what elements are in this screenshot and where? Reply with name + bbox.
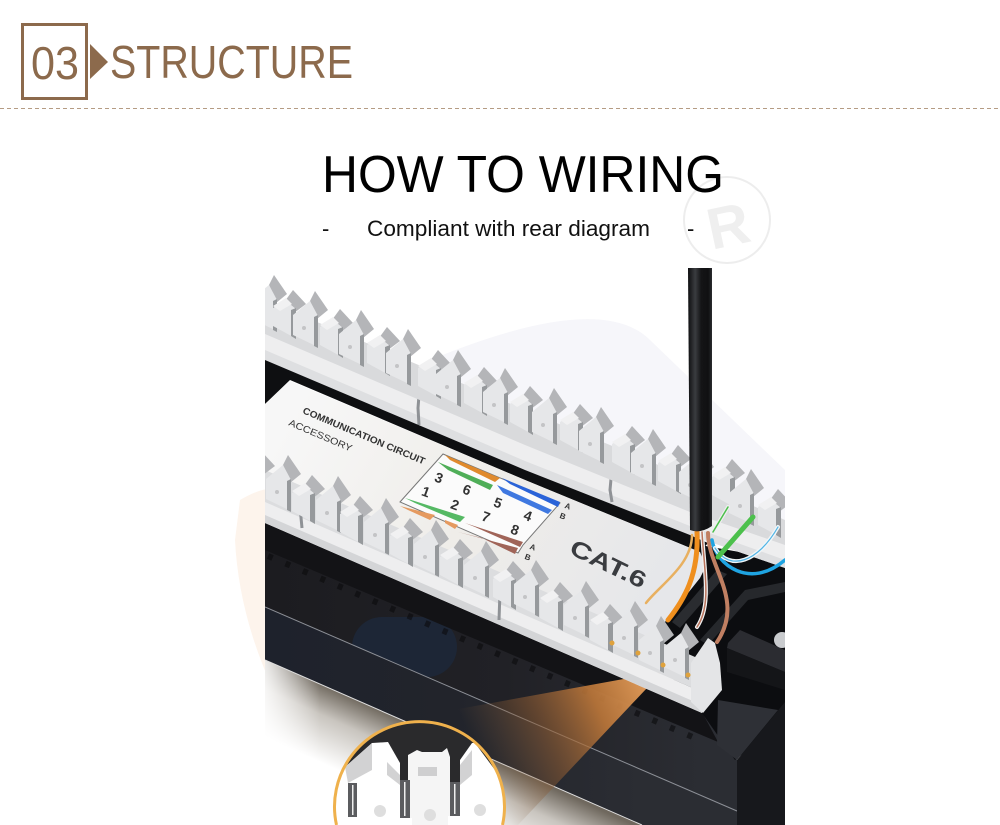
lens disc (334, 722, 505, 825)
gold contacts (610, 640, 690, 678)
rail shadow (265, 523, 718, 742)
lens white teeth (335, 742, 400, 825)
registered watermark (684, 177, 770, 263)
wiring diagram (400, 454, 572, 563)
section number box (22, 24, 86, 98)
top comb backing (265, 300, 785, 545)
title: HOW TO WIRING (322, 146, 724, 204)
lower rail band (265, 502, 702, 713)
subtitle: - (687, 216, 694, 241)
white label plate (265, 381, 706, 640)
zoom circle detail (334, 722, 505, 825)
rail crack (418, 383, 420, 425)
wiring diagram: 2 (449, 496, 462, 514)
registered watermark: R (701, 190, 756, 263)
wiring diagram: 5 (492, 494, 505, 512)
blue tint on body (352, 617, 457, 677)
label text: ACCESSORY (287, 418, 354, 455)
printed marks on body (268, 556, 695, 738)
wiring diagram: 6 (461, 481, 474, 499)
wiring diagram: A (528, 542, 537, 553)
orange magnifier beam (470, 673, 660, 824)
section number box: 03 (31, 37, 79, 89)
subtitle: Compliant with rear diagram (367, 216, 650, 241)
section heading: STRUCTURE (110, 36, 353, 88)
rail end cap (691, 638, 722, 713)
subtitle: - (322, 216, 329, 241)
CAT.6 mark: CAT.6 (566, 534, 651, 593)
top rail band (265, 329, 785, 568)
wiring diagram: 1 (420, 483, 433, 501)
wiring diagram: 8 (509, 521, 522, 539)
wiring diagram: B (558, 511, 567, 522)
wiring diagram: B (523, 552, 532, 563)
label text: COMMUNICATION CIRCUIT (301, 406, 427, 467)
right block front (737, 702, 785, 825)
black recess strip (265, 360, 708, 552)
wiring diagram: 3 (433, 469, 446, 487)
front lower panel (265, 608, 425, 716)
dark body top face (265, 523, 737, 825)
coloured wires (646, 507, 785, 642)
lower comb backing (265, 470, 702, 692)
lower comb teeth (242, 452, 699, 680)
dark right machinery (664, 546, 785, 760)
arrow icon (90, 44, 108, 79)
product photo: patch panel (242, 268, 791, 825)
background watermark shapes (235, 319, 785, 760)
lens ring (334, 722, 505, 825)
top comb teeth (252, 275, 791, 538)
black cable (688, 268, 712, 531)
underside fade (265, 660, 642, 825)
wiring diagram: 4 (522, 507, 535, 525)
wiring diagram: A (563, 501, 572, 512)
wiring diagram: 7 (480, 508, 493, 526)
